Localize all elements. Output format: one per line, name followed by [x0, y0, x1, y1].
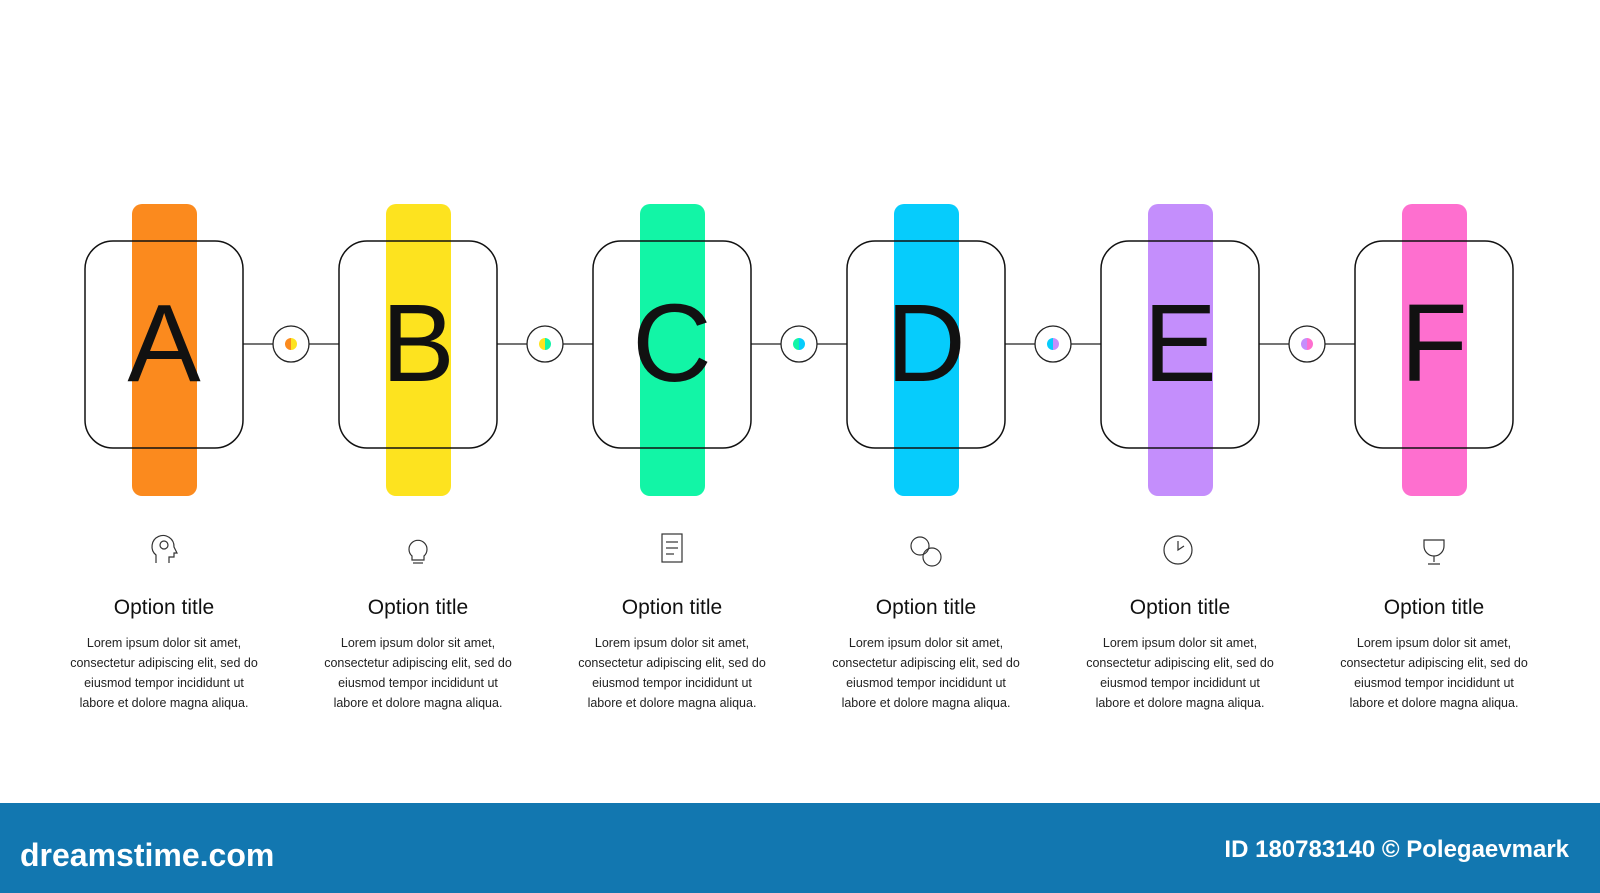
footer: dreamstime.com: [20, 837, 274, 873]
titles and body texts: [70, 596, 1528, 710]
titles and body texts: Option title: [1384, 596, 1484, 619]
titles and body texts: Option title: [876, 596, 976, 619]
titles and body texts: eiusmod tempor incididunt ut: [1354, 676, 1514, 690]
titles and body texts: consectetur adipiscing elit, sed do: [578, 656, 766, 670]
step F: [1355, 204, 1513, 496]
titles and body texts: Option title: [1130, 596, 1230, 619]
titles and body texts: consectetur adipiscing elit, sed do: [832, 656, 1020, 670]
titles and body texts: Lorem ipsum dolor sit amet,: [1103, 636, 1257, 650]
footer: ID 180783140 © Polegaevmark: [1224, 836, 1570, 863]
titles and body texts: consectetur adipiscing elit, sed do: [1086, 656, 1274, 670]
titles and body texts: Lorem ipsum dolor sit amet,: [341, 636, 495, 650]
icon: coins: [911, 537, 941, 566]
titles and body texts: consectetur adipiscing elit, sed do: [1340, 656, 1528, 670]
titles and body texts: labore et dolore magna aliqua.: [334, 696, 502, 710]
titles and body texts: Lorem ipsum dolor sit amet,: [87, 636, 241, 650]
titles and body texts: Option title: [622, 596, 722, 619]
step B: B: [381, 282, 455, 405]
titles and body texts: labore et dolore magna aliqua.: [1350, 696, 1518, 710]
titles and body texts: eiusmod tempor incididunt ut: [338, 676, 498, 690]
titles and body texts: labore et dolore magna aliqua.: [588, 696, 756, 710]
titles and body texts: labore et dolore magna aliqua.: [80, 696, 248, 710]
titles and body texts: consectetur adipiscing elit, sed do: [70, 656, 258, 670]
step C: [593, 204, 751, 496]
titles and body texts: consectetur adipiscing elit, sed do: [324, 656, 512, 670]
icon: trophy: [1424, 540, 1444, 564]
step F: F: [1400, 282, 1468, 405]
titles and body texts: labore et dolore magna aliqua.: [842, 696, 1010, 710]
step B: [339, 204, 497, 496]
icon: document: [662, 534, 682, 562]
step E: [1101, 204, 1259, 496]
icon: head with gear: [152, 536, 177, 563]
titles and body texts: Lorem ipsum dolor sit amet,: [595, 636, 749, 650]
icon: lightbulb: [409, 540, 427, 563]
titles and body texts: Option title: [114, 596, 214, 619]
titles and body texts: Option title: [368, 596, 468, 619]
icon: clock: [1164, 536, 1192, 564]
titles and body texts: labore et dolore magna aliqua.: [1096, 696, 1264, 710]
step A: [85, 204, 243, 496]
connector dots: [273, 326, 1325, 362]
titles and body texts: eiusmod tempor incididunt ut: [1100, 676, 1260, 690]
footer: [0, 803, 1600, 893]
titles and body texts: Lorem ipsum dolor sit amet,: [1357, 636, 1511, 650]
step A: A: [127, 282, 201, 405]
titles and body texts: Lorem ipsum dolor sit amet,: [849, 636, 1003, 650]
step E: E: [1143, 282, 1217, 405]
connector lines: [243, 343, 1355, 345]
titles and body texts: eiusmod tempor incididunt ut: [84, 676, 244, 690]
titles and body texts: eiusmod tempor incididunt ut: [592, 676, 752, 690]
step D: [847, 204, 1005, 496]
icons: [152, 534, 1444, 566]
step D: D: [886, 282, 966, 405]
titles and body texts: eiusmod tempor incididunt ut: [846, 676, 1006, 690]
step C: C: [632, 282, 712, 405]
